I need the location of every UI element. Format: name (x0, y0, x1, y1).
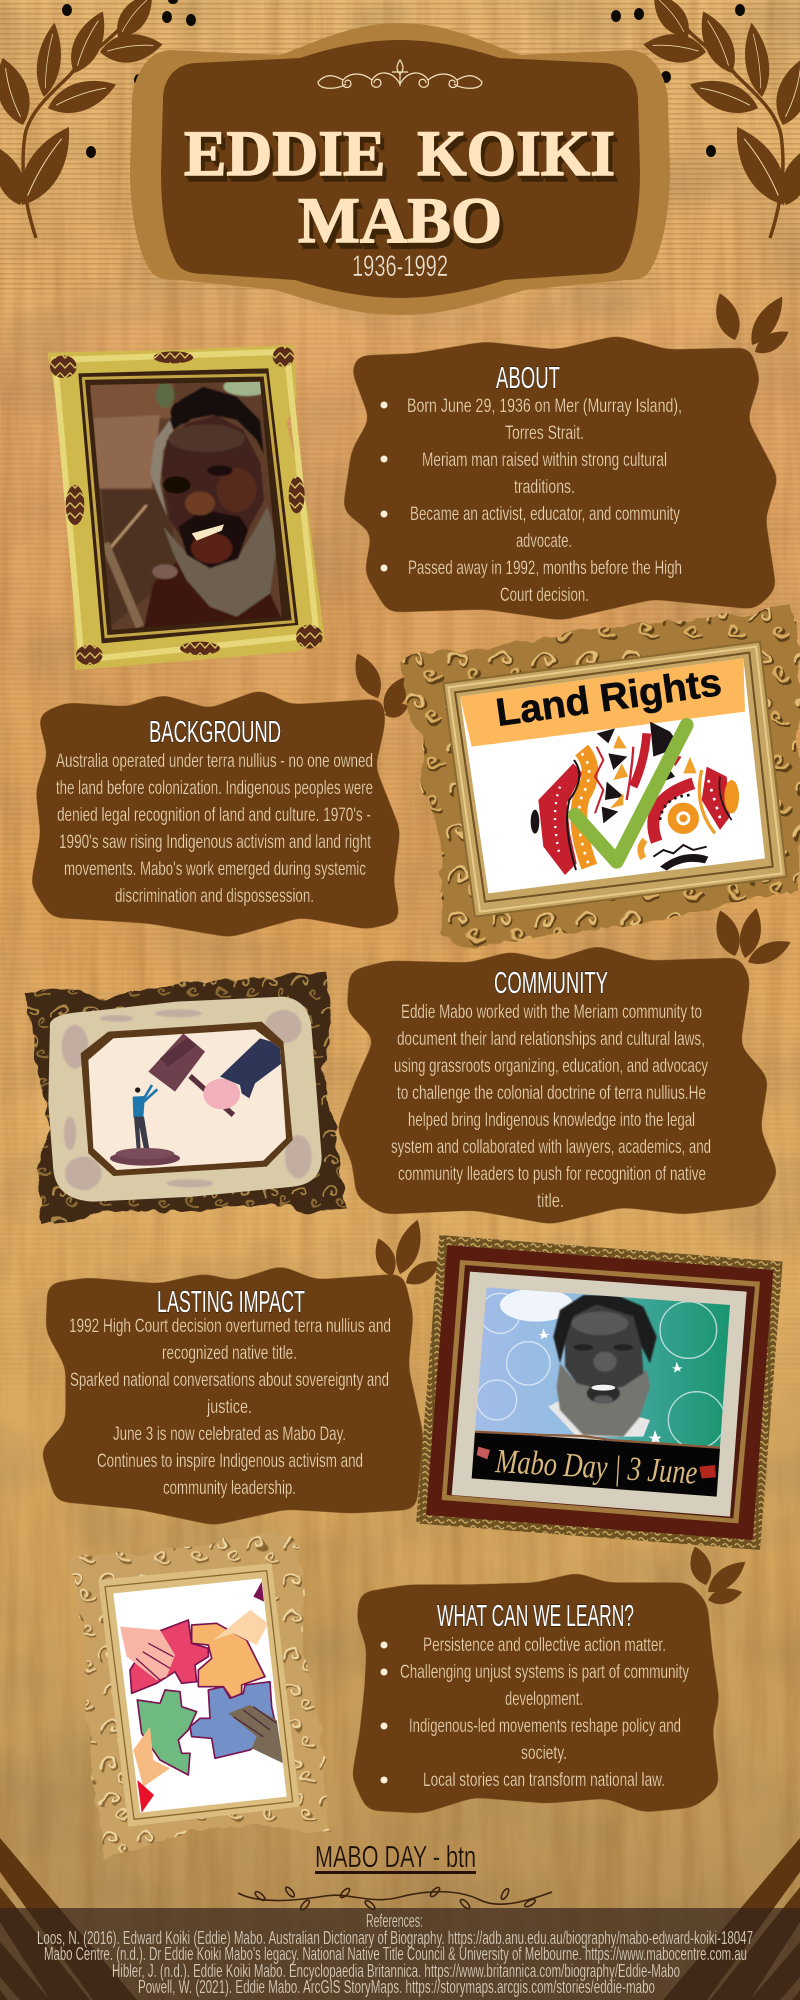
body text: justice. (206, 1397, 252, 1418)
body text: movements. Mabo's work emerged during systemic (64, 859, 366, 880)
panel: what can we learn (352, 1573, 719, 1813)
panel: lasting impact (41, 1266, 423, 1525)
panel: about (343, 336, 778, 620)
panel: background (31, 690, 400, 937)
heading: COMMUNITY (494, 965, 608, 1000)
puzzle frame (68, 1533, 330, 1860)
bullet list (380, 396, 682, 606)
picture: gavel over person (88, 1029, 286, 1170)
bullet list: Passed away in 1992, months before the High (408, 558, 682, 579)
heading: ABOUT (496, 360, 560, 395)
link: mabo day btn (315, 1839, 476, 1874)
bullet list: Persistence and collective action matter. (423, 1635, 666, 1656)
body text (56, 751, 373, 907)
body text (69, 1316, 391, 1499)
title text: EDDIE KOIKI (186, 121, 617, 193)
bullet list: Local stories can transform national law. (423, 1770, 665, 1791)
portrait frame with photo of Eddie Mabo (47, 345, 325, 670)
body text: 1990's saw rising Indigenous activism and land right (59, 832, 372, 853)
body text: denied legal recognition of land and culture. 1970's - (57, 805, 371, 826)
bottom diagonal stripes right (663, 1838, 800, 2000)
bullet list: Meriam man raised within strong cultural (422, 450, 667, 471)
bullet list: development. (505, 1689, 583, 1710)
heading: LASTING IMPACT (157, 1284, 305, 1319)
picture: white card with orange band (460, 658, 765, 893)
bullet list: Challenging unjust systems is part of community (400, 1662, 689, 1683)
title text (184, 118, 619, 263)
panel: community (337, 946, 778, 1224)
body text: recognized native title. (162, 1343, 297, 1364)
heading: WHAT CAN WE LEARN? (437, 1598, 634, 1633)
picture: aboriginal art australia map (531, 722, 739, 875)
references bar: References: (366, 1911, 423, 1931)
bullet list: Born June 29, 1936 on Mer (Murray Island), (407, 396, 682, 417)
body text: title. (537, 1191, 564, 1212)
picture: mabo day portrait poster (473, 1287, 733, 1450)
bullet list: Became an activist, educator, and community (410, 504, 680, 525)
bottom diagonal stripes left (0, 1838, 137, 2000)
bullet list: Court decision. (500, 585, 589, 606)
bullet list: society. (521, 1743, 567, 1764)
icon: leaf tuft by community panel (710, 906, 794, 970)
title text: MABO (302, 191, 506, 263)
heading: BACKGROUND (149, 714, 281, 749)
icon: leaf branch right (642, 0, 800, 238)
icon: leaf tuft top right (710, 290, 793, 359)
gavel frame (27, 972, 347, 1225)
icon: ornament flourish (318, 60, 482, 88)
mabo day frame (416, 1235, 783, 1550)
body text: 1992 High Court decision overturned terra nullius and (69, 1316, 391, 1337)
bullet list: traditions. (514, 477, 575, 498)
vine divider (238, 1886, 552, 1911)
icon: leaf branch left (0, 0, 164, 238)
date range: 1936-1992 (352, 250, 448, 283)
body text: the land before colonization. Indigenous peoples were (56, 778, 373, 799)
body text: Sparked national conversations about sovereignty and (70, 1370, 389, 1391)
icon: leaf tuft by learn panel (685, 1544, 751, 1607)
body text: discrimination and dispossession. (115, 886, 314, 907)
icon: leaf tuft by background panel (348, 649, 417, 721)
title plaque (130, 23, 670, 315)
land rights frame (400, 605, 800, 948)
picture: hands joining puzzle pieces (120, 1582, 283, 1813)
mabo day caption: Mabo Day | 3 June (494, 1443, 698, 1492)
body text: Continues to inspire Indigenous activism and (97, 1451, 363, 1472)
icon: leaf tuft by mabo day frame (370, 1216, 445, 1291)
references bar (0, 1908, 800, 2000)
bullet list (380, 1635, 689, 1791)
bullet list: advocate. (516, 531, 572, 552)
title text: MABO (300, 188, 504, 260)
decorative dots (62, 0, 745, 158)
photo: Eddie Mabo smiling (90, 382, 282, 630)
link: mabo day btn: MABO DAY - btn (315, 1839, 476, 1874)
title text: MABO (298, 185, 502, 257)
bullet list: Indigenous-led movements reshape policy and (409, 1716, 681, 1737)
body text (391, 1002, 711, 1212)
bullet list: Torres Strait. (505, 423, 584, 444)
title text: EDDIE KOIKI (188, 124, 619, 196)
land rights caption: Land Rights (493, 661, 724, 735)
body text: community leadership. (163, 1478, 296, 1499)
body text: Australia operated under terra nullius - no one owned (56, 751, 373, 772)
body text: June 3 is now celebrated as Mabo Day. (113, 1424, 346, 1445)
title text: EDDIE KOIKI (184, 118, 615, 190)
